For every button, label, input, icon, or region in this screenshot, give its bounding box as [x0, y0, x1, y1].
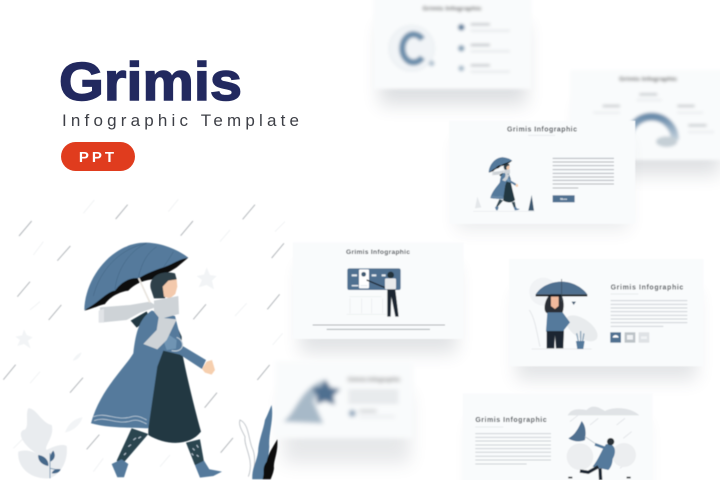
woman figure — [84, 243, 222, 478]
badge: PPT — [61, 142, 135, 171]
slide card: star chart (blurred) — [275, 361, 414, 463]
slide card: woman with umbrella and text — [449, 121, 635, 230]
slide card: woman in storm — [463, 393, 653, 480]
pale plant with blue sprig — [18, 408, 67, 478]
slide card: star chart (blurred): Grimis Infographic — [347, 377, 401, 384]
faint falling leaves — [15, 267, 217, 433]
subtitle: Infographic Template: Infographic Template — [62, 111, 299, 130]
slide card: woman under umbrella — [509, 259, 704, 380]
badge: PPT: PPT — [79, 149, 117, 166]
slide card: touch screen presenter: Grimis Infographic — [346, 249, 410, 256]
title: Grimis: Grimis — [59, 52, 242, 112]
illustration: woman with umbrella in the rain — [3, 199, 285, 479]
slide card: touch screen presenter — [293, 242, 464, 353]
slide card: woman with umbrella and text: Grimis Infographic — [507, 127, 577, 134]
right plants — [240, 405, 277, 479]
slide card: woman with umbrella and text: More — [560, 197, 568, 201]
slide card: woman in storm: Grimis Infographic — [475, 417, 547, 424]
slide card: top circular chart (blurred): Grimis Infographic — [422, 5, 482, 12]
slide card: right arch chart (blurred) — [570, 70, 720, 175]
slide card: top circular chart (blurred) — [373, 0, 532, 105]
rain streaks — [3, 199, 285, 472]
slide card: right arch chart (blurred): Grimis Infographic — [619, 76, 678, 83]
slide card: woman under umbrella: Grimis Infographic — [611, 284, 683, 291]
